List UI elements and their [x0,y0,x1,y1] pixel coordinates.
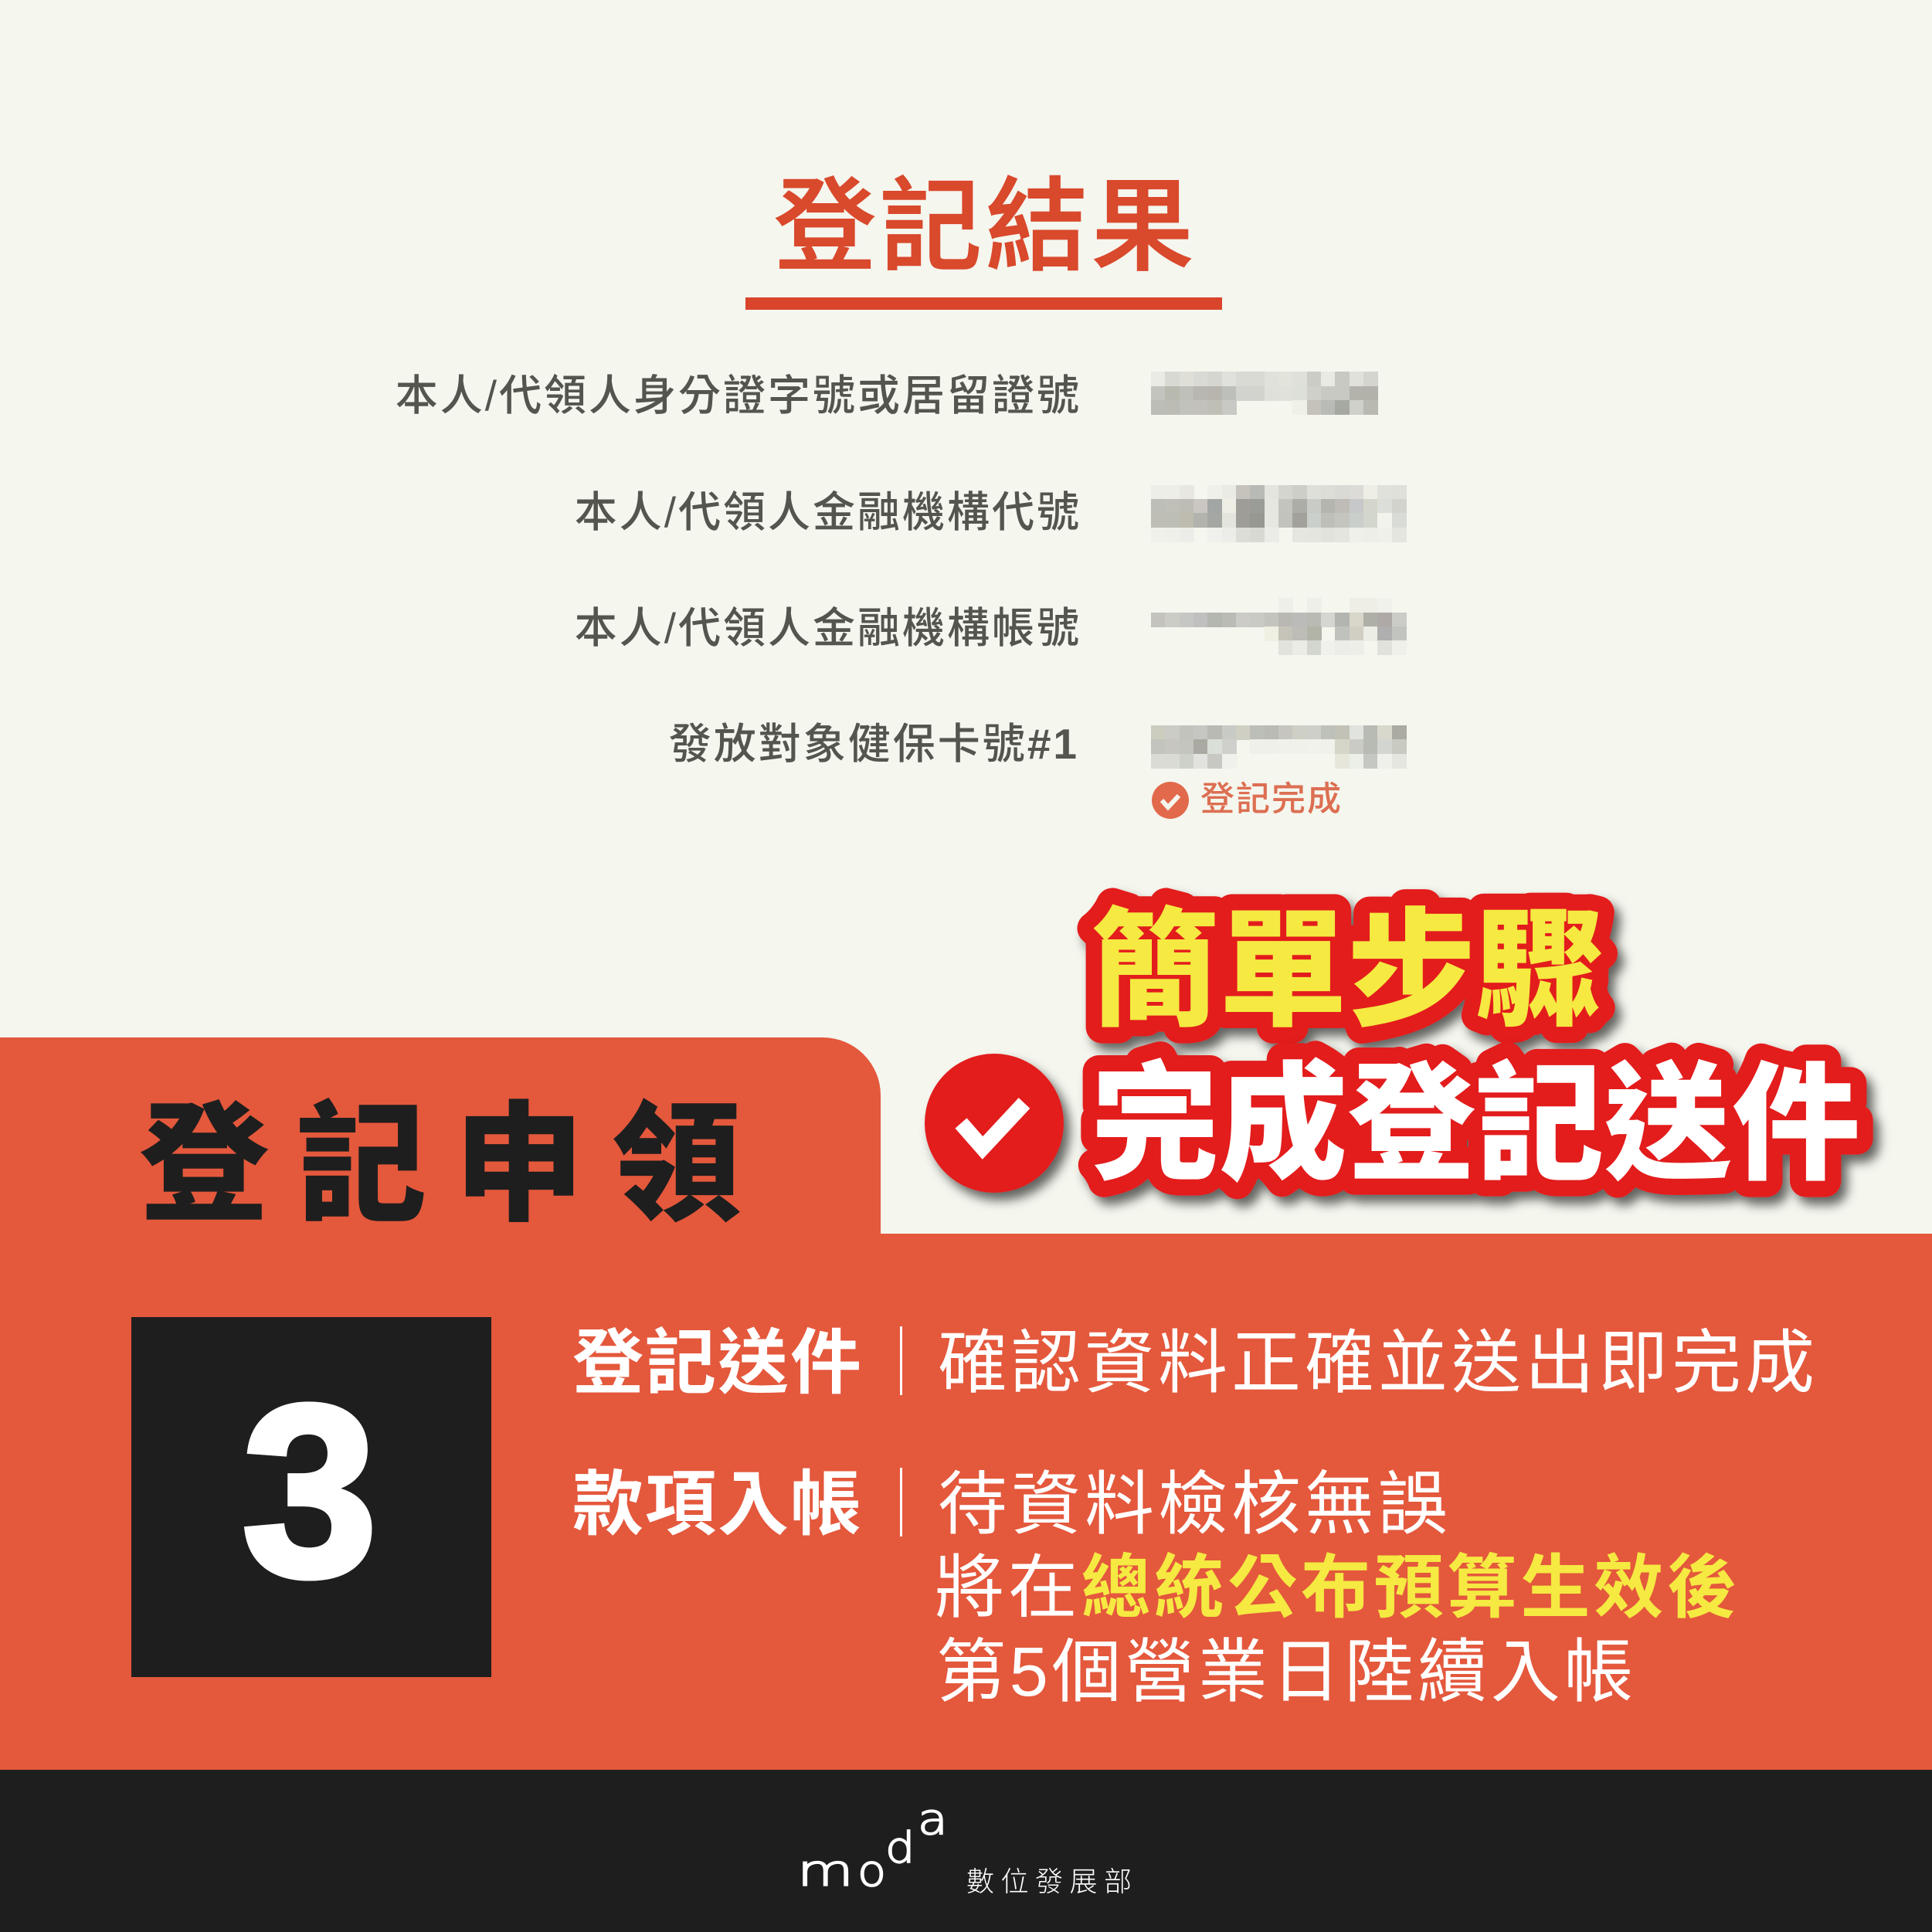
panel heading: 登記申領: 登記申領 [139,1092,769,1238]
logo: moda [797,1794,948,1896]
registration done status: 登記完成 [1200,780,1343,818]
ministry name: 數位發展部 [966,1866,1139,1897]
form labels [396,372,1081,768]
row text: 待資料檢核無誤 [935,1466,1740,1711]
blurred values [1151,372,1407,769]
logo: moda: d [885,1823,915,1873]
row text: 待資料檢核無誤: 將在總統公布預算生效後 [935,1550,1740,1627]
heading: 簡單步驟: 簡單步驟 [1091,900,1604,1043]
form labels: 本人/代領人金融機構帳號 [575,604,1081,652]
footer bar [0,1770,1932,1932]
logo: moda: o [857,1846,886,1896]
row text: 待資料檢核無誤: 待資料檢核無誤 [938,1466,1452,1543]
row text: 待資料檢核無誤: 第5個營業日陸續入帳 [936,1634,1637,1711]
form labels: 本人/代領人金融機構代號 [575,488,1081,536]
heading: 完成登記送件: 完成登記送件 [1091,1054,1860,1197]
row text: 確認資料: 確認資料正確並送出即完成 [938,1325,1818,1402]
heading: 簡單步驟: 簡單步驟 [1091,900,1604,1043]
step number box: 3 [242,1354,378,1627]
form labels: 發放對象健保卡號#1 [669,720,1079,768]
heading: 完成登記送件: 完成登記送件 [1091,1054,1860,1197]
icon: check badge [925,1054,1064,1193]
logo: moda: a [918,1794,948,1844]
screenshot title: 登記結果 [774,170,1197,284]
logo: moda: m [797,1847,854,1896]
row label: 登記送件: 登記送件 [572,1324,863,1403]
form labels: 本人/代領人身分證字號或居留證號 [396,372,1081,419]
row label: 款項入帳: 款項入帳 [572,1465,863,1544]
step number box [131,1317,491,1677]
panel: orange background [0,1037,1932,1770]
